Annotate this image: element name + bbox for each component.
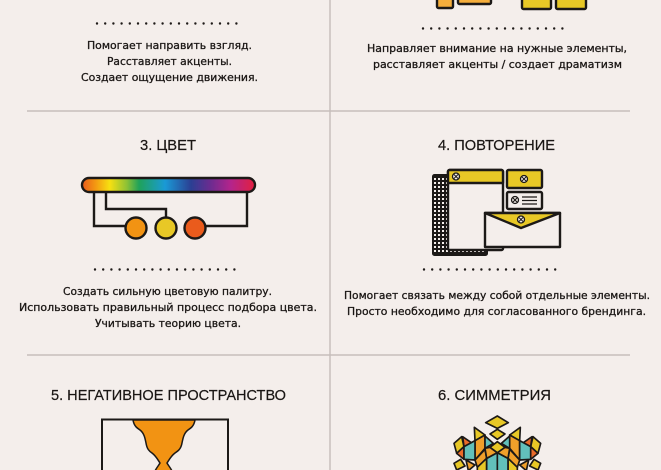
description: Просто необходимо для согласованного брендинга.: [347, 305, 646, 318]
panel: colour: [19, 137, 317, 330]
panel: negative space: [51, 387, 286, 470]
description: расставляет акценты / создает драматизм: [373, 58, 622, 71]
dotted separator: [424, 268, 561, 271]
description: [367, 42, 627, 71]
dotted separator: [97, 22, 237, 25]
panel: contrast: [367, 0, 627, 71]
description: [19, 285, 317, 330]
heading: 6. СИММЕТРИЯ: [438, 387, 551, 404]
description: Расставляет акценты.: [107, 55, 232, 68]
description: [344, 289, 650, 318]
panel: symmetry: [438, 387, 551, 470]
description: Направляет внимание на нужные элементы,: [367, 42, 627, 55]
description: Помогает связать между собой отдельные элементы.: [344, 289, 650, 302]
dotted separator: [423, 27, 564, 30]
heading: 3. ЦВЕТ: [140, 137, 196, 154]
description: Помогает направить взгляд.: [87, 39, 252, 52]
description: Использовать правильный процесс подбора цвета.: [19, 301, 317, 314]
description: [81, 39, 258, 84]
panel: repetition: [344, 137, 650, 318]
description: Создать сильную цветовую палитру.: [63, 285, 272, 298]
heading: 4. ПОВТОРЕНИЕ: [438, 137, 555, 154]
description: Учитывать теорию цвета.: [95, 317, 241, 330]
dotted separator: [95, 268, 236, 271]
icon: rainbow palette: [82, 178, 255, 238]
description: Создает ощущение движения.: [81, 71, 258, 84]
icon: vase and faces: [102, 420, 228, 470]
panel: direction text block: [81, 24, 258, 84]
icon: cropped blocks: [437, 0, 586, 9]
icon: symmetric mosaic: [454, 416, 541, 470]
icon: brand stationery: [433, 170, 560, 255]
heading: 5. НЕГАТИВНОЕ ПРОСТРАНСТВО: [51, 387, 286, 404]
